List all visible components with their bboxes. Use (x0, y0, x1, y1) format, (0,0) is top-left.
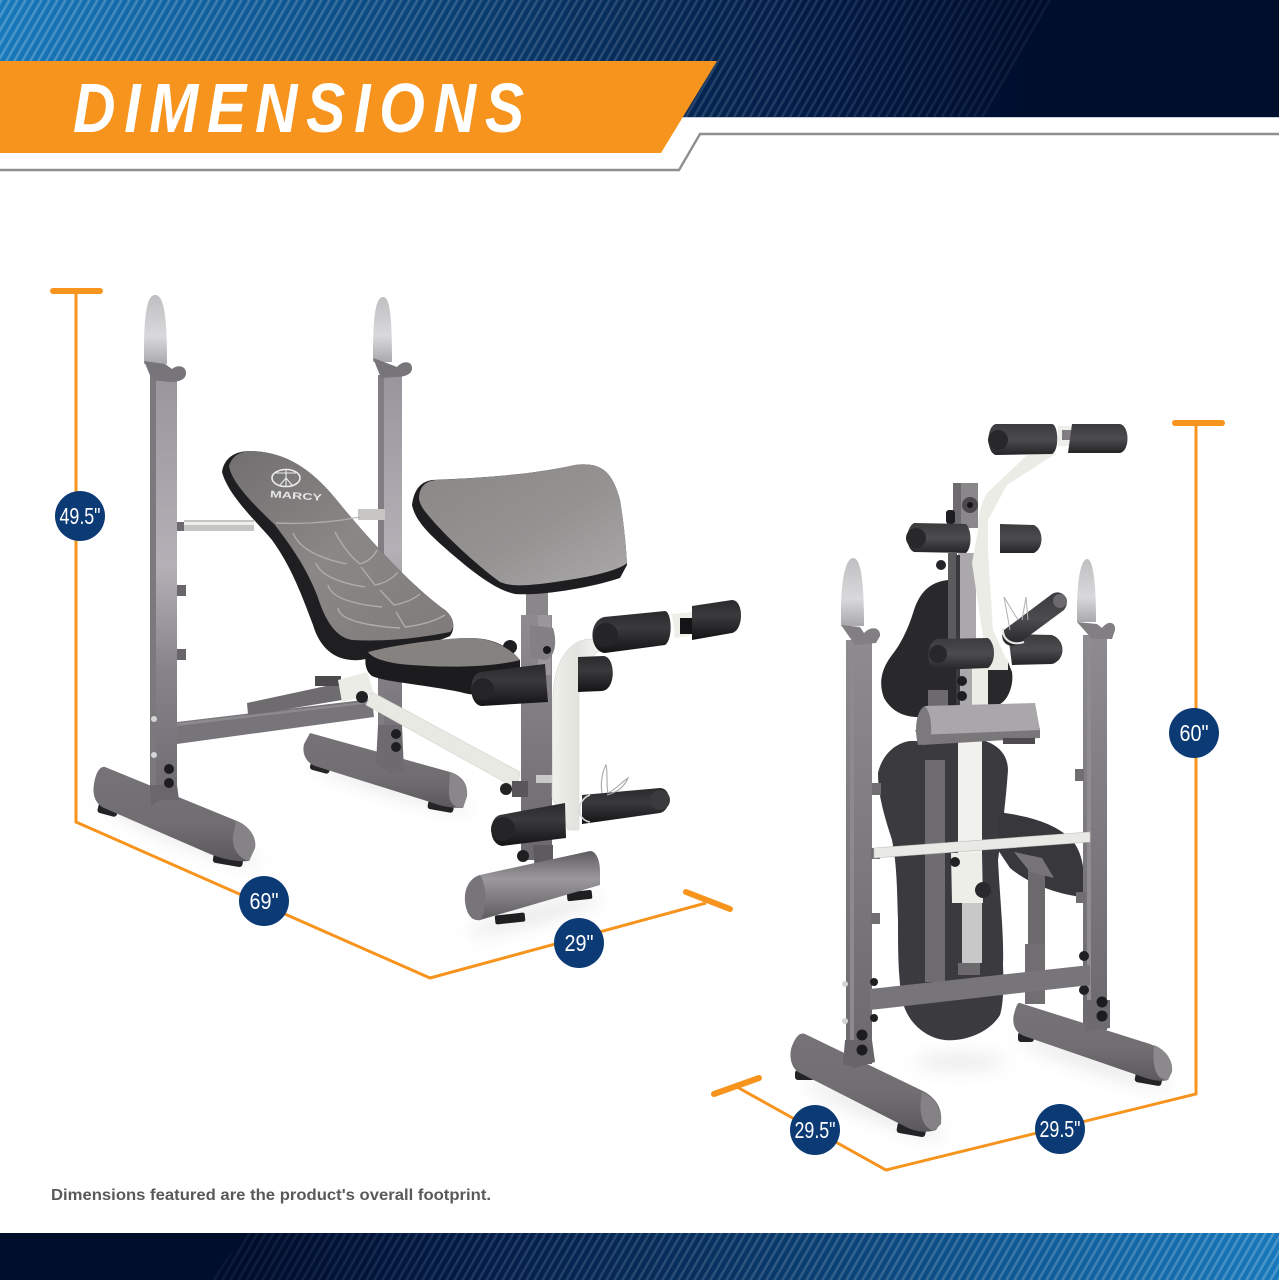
front base foot (465, 845, 600, 925)
lower left roller (491, 803, 566, 846)
badge: 69 inches: 69" (250, 888, 278, 914)
floor shadows (97, 752, 1174, 1146)
incline adjuster arm (247, 672, 374, 715)
pad logo: MARCY (270, 489, 323, 504)
lower right bar (582, 788, 669, 824)
badge: width 29.5 inches (1035, 1104, 1085, 1154)
illustration: weight bench folded front view (790, 424, 1172, 1138)
right bench dimension lines (714, 423, 1222, 1170)
folded base cross member (915, 703, 1040, 745)
upper roller right (692, 600, 741, 640)
badge: 29 inches: 29" (564, 930, 594, 956)
pad logo (270, 470, 323, 504)
seat post (1014, 852, 1054, 1004)
left and right uprights (841, 558, 1115, 1064)
header grey underline (0, 134, 1279, 170)
rear upright (373, 297, 412, 765)
spring clip (601, 765, 628, 795)
lower crossbar (870, 965, 1090, 1010)
illustration: weight bench side view (93, 295, 741, 925)
chrome crossbar (874, 832, 1090, 858)
badge: width 29.5 inches: 29.5" (1040, 1116, 1080, 1142)
badge: 60 inches: 60" (1180, 720, 1208, 746)
crossbar and chrome bar (177, 509, 385, 744)
lower folded pad (878, 741, 1008, 1040)
back pad (222, 451, 453, 660)
badge: 49.5 inches: 49.5" (60, 503, 100, 529)
upper folded pad (881, 580, 1012, 717)
front upright (144, 295, 186, 797)
rear foot (303, 725, 467, 813)
title: DIMENSIONS (73, 68, 524, 147)
badge: 29 inches (554, 918, 604, 968)
footnote: Dimensions featured are the product's overall footprint. (51, 1187, 491, 1204)
folded view right foot (1013, 996, 1172, 1086)
preacher curl pad (412, 464, 627, 594)
white column and arm (950, 453, 1057, 975)
white diagonal tube (366, 692, 520, 789)
badge: depth 29.5 inches: 29.5" (794, 1117, 836, 1143)
folded view left foot (790, 981, 941, 1138)
front middle roller (471, 664, 548, 706)
badge: 69 inches (239, 876, 289, 926)
central column (925, 483, 978, 982)
column (500, 590, 555, 860)
rear seat pad (998, 812, 1084, 897)
upper roller left (592, 611, 671, 653)
folded rollers (906, 424, 1128, 670)
left bench dimension lines (53, 291, 730, 978)
rear middle roller (578, 656, 613, 692)
badge: 60 inches (1169, 708, 1219, 758)
upper roller connector (672, 612, 694, 638)
footer blue hatched band (0, 1233, 1279, 1280)
badge: 49.5 inches (55, 491, 105, 541)
pad stitching (276, 517, 445, 628)
header blue hatched band (0, 0, 1279, 118)
seat pad (365, 638, 520, 695)
rollers (471, 600, 741, 846)
white curved arm (552, 639, 600, 830)
badge: depth 29.5 inches (790, 1105, 840, 1155)
front foot (93, 764, 255, 868)
title banner (0, 61, 717, 153)
